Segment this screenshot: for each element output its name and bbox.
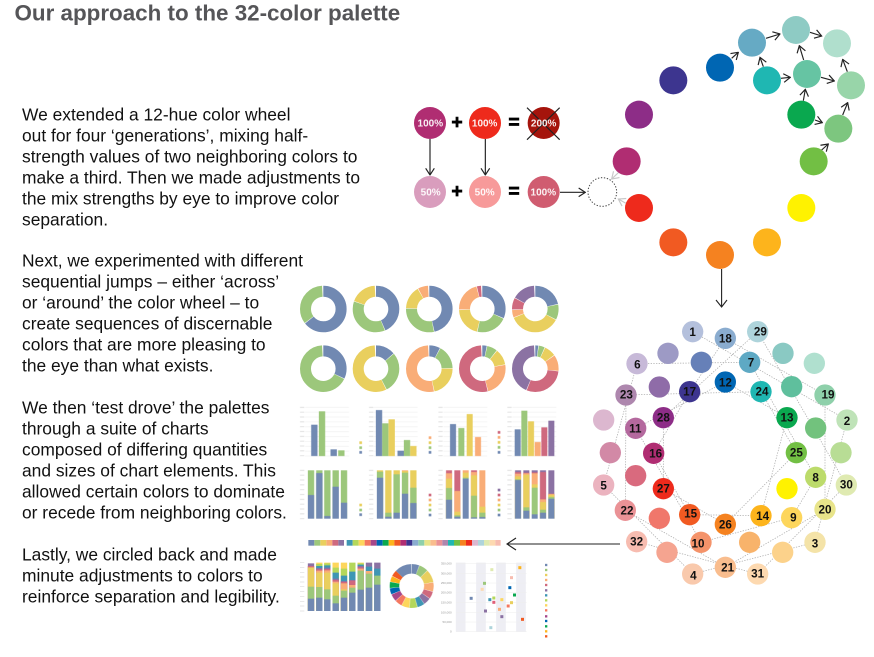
text block: test drive: or recede from neighboring colors. [22, 502, 287, 522]
numbered color wheel: 15 [684, 508, 698, 521]
text block: color wheel extension: make a third. Then we made adjustments to [22, 168, 360, 188]
scatter plot: 100,000 [441, 610, 452, 614]
color mixing diagram: 50% [475, 188, 495, 199]
numbered color wheel: 16 [649, 448, 663, 461]
text block: test drive: and sizes of chart elements. This [22, 460, 276, 480]
bar charts: right pair [438, 407, 556, 519]
color wheel [588, 16, 865, 269]
text block: sequential jumps: create sequences of discernable [22, 314, 272, 334]
text block: color wheel extension: separation. [22, 210, 108, 230]
text block: final adjustments: Lastly, we circled back and made [22, 544, 277, 564]
text block: sequential jumps: sequential jumps – either ‘across’ [22, 272, 279, 292]
color mixing diagram: 100% [472, 119, 498, 130]
numbered color wheel: 10 [692, 538, 704, 551]
numbered color wheel: 14 [756, 510, 770, 523]
color mixing diagram: 100% [531, 188, 556, 199]
text block: test drive: We then ‘test drove’ the palettes [22, 398, 270, 418]
text block: test drive: composed of differing quantities [22, 440, 268, 460]
numbered color wheel: 28 [657, 411, 670, 424]
numbered color wheel: 19 [822, 389, 835, 402]
scatter plot: 250,000 [441, 581, 452, 585]
text block: final adjustments: reinforce separation and legibility. [22, 586, 280, 606]
text block: test drive: through a suite of charts [22, 418, 209, 438]
color mixing diagram: 200% [531, 119, 557, 130]
scatter plot: 350,000 [441, 561, 452, 565]
text block: color wheel extension: out for four ‘generations’, mixing half- [22, 126, 308, 146]
numbered color wheel: 27 [657, 483, 670, 496]
text block: final adjustments [22, 544, 280, 606]
numbered color wheel: 31 [751, 568, 765, 581]
text block: sequential jumps: the eye than what exists. [22, 356, 213, 376]
color mixing diagram: 50% [421, 188, 441, 199]
scatter plot: 50,000 [443, 620, 452, 624]
scatter plot: 150,000 [441, 600, 452, 604]
scatter plot: 0 [450, 630, 452, 634]
text block: color wheel extension: the mix strengths by eye to improve color [22, 189, 339, 209]
numbered color wheel: 24 [756, 386, 769, 399]
numbered color wheel: 29 [754, 326, 767, 339]
title: Our approach to the 32-color palette [14, 1, 400, 26]
text block: sequential jumps: Next, we experimented with different [22, 250, 303, 270]
palette donut chart [394, 569, 429, 603]
text block: test drive: allowed certain colors to dominate [22, 482, 285, 502]
text block: sequential jumps [22, 250, 303, 376]
numbered color wheel: 3 [812, 538, 819, 551]
color mixing diagram: + [451, 182, 463, 203]
numbered color wheel: 11 [629, 422, 642, 435]
palette strip [308, 534, 501, 551]
arrow: numbered wheel to palette strip [507, 538, 620, 550]
arrow: wheel to numbered wheel [716, 269, 727, 307]
numbered color wheel: 23 [620, 389, 633, 402]
donut charts [306, 291, 553, 386]
text block: color wheel extension: strength values of two neighboring colors to [22, 147, 357, 167]
numbered color wheel: 30 [840, 478, 853, 491]
text block: sequential jumps: colors that are more pleasing to [22, 334, 266, 354]
bar charts: left pair [300, 407, 431, 519]
numbered color wheel: 13 [781, 412, 794, 425]
numbered color wheel: 22 [621, 505, 634, 518]
color mixing diagram: = [508, 113, 520, 134]
stacked bar chart with full palette [300, 563, 377, 611]
numbered color wheel: 1 [689, 326, 696, 339]
numbered color wheel [593, 321, 858, 585]
numbered color wheel: 12 [719, 376, 732, 389]
numbered color wheel: 26 [719, 518, 732, 531]
text block: final adjustments: minute adjustments to colors to [22, 566, 263, 586]
numbered color wheel: 5 [600, 479, 607, 492]
numbered color wheel: 21 [721, 561, 735, 574]
color mixing diagram: 100% [418, 119, 443, 130]
numbered color wheel: 7 [748, 357, 754, 370]
color mixing diagram: + [451, 113, 463, 134]
color mixing diagram: = [508, 182, 520, 203]
color mixing diagram [414, 107, 585, 208]
text block: sequential jumps: or ‘around’ the color wheel – to [22, 292, 259, 312]
numbered color wheel: 17 [683, 386, 696, 399]
numbered color wheel: 6 [634, 358, 641, 371]
numbered color wheel: 2 [844, 415, 851, 428]
scatter plot: 200,000 [441, 591, 452, 595]
numbered color wheel: 8 [812, 472, 819, 485]
numbered color wheel: 20 [819, 504, 831, 517]
numbered color wheel: 32 [630, 535, 644, 548]
scatter plot [441, 561, 547, 636]
numbered color wheel: 25 [790, 447, 803, 460]
text block: test drive [22, 398, 287, 522]
numbered color wheel: 4 [690, 569, 697, 582]
scatter plot: 300,000 [441, 571, 452, 575]
text block: color wheel extension [22, 105, 360, 230]
numbered color wheel: 9 [790, 512, 797, 525]
numbered color wheel: 18 [719, 333, 732, 346]
text block: color wheel extension: We extended a 12-hue color wheel [22, 105, 290, 125]
